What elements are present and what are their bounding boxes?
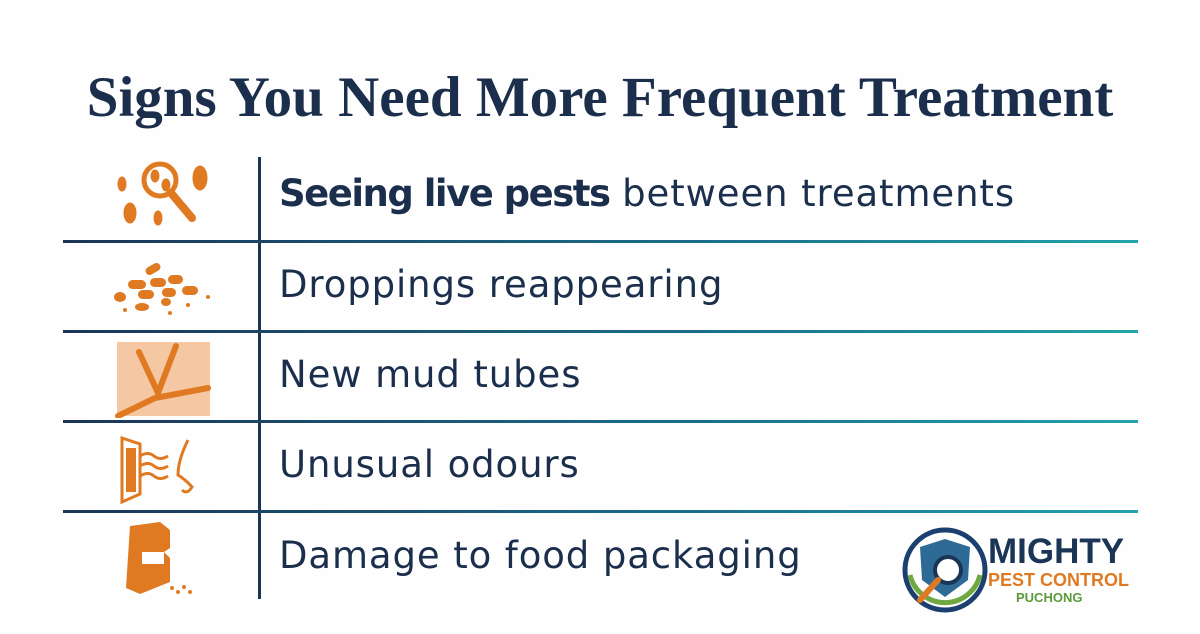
row 4 text: Unusual odours <box>279 443 580 486</box>
row 2 text: Droppings reappearing <box>279 263 723 306</box>
logo <box>902 528 1129 612</box>
icon: mud tubes <box>115 342 211 418</box>
title: Signs You Need More Frequent Treatment <box>87 66 1113 129</box>
vertical divider <box>258 157 261 599</box>
icon: odour <box>120 436 194 504</box>
logo emblem <box>902 528 988 612</box>
row 3 text: New mud tubes <box>279 353 581 396</box>
row 1 text: Seeing live pests between treatments <box>279 172 1015 215</box>
row 5 text: Damage to food packaging <box>279 534 802 577</box>
icon: magnifier with pests <box>118 162 208 226</box>
logo: PEST CONTROL <box>988 570 1129 590</box>
icon: damaged food box <box>126 522 192 594</box>
icon: droppings <box>114 263 210 315</box>
logo text: MIGHTY <box>988 532 1124 571</box>
logo: PUCHONG <box>1016 590 1082 605</box>
